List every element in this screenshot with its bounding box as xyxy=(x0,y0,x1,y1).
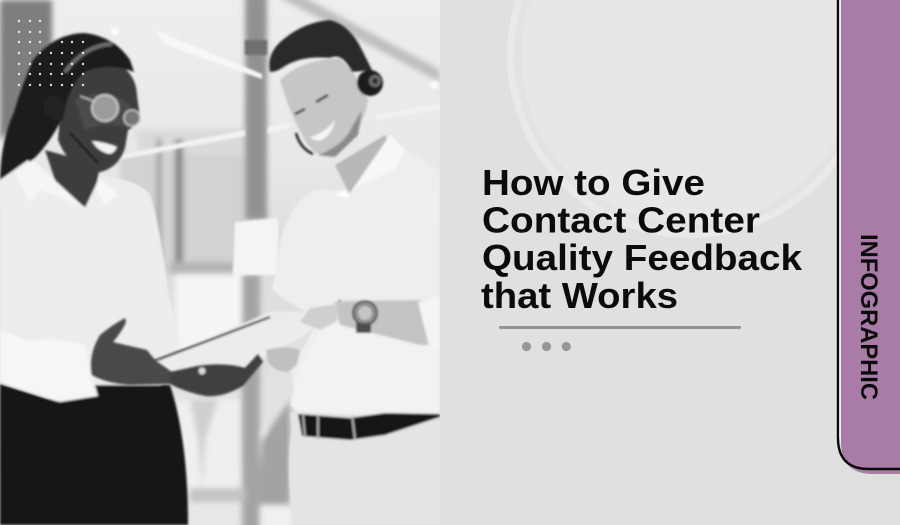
title: that Works xyxy=(481,275,678,316)
photo: two smiling contact center agents reviewing a clipboard xyxy=(0,0,440,525)
title: Quality Feedback xyxy=(482,237,803,278)
divider line xyxy=(499,326,741,329)
title: Contact Center xyxy=(482,200,760,240)
tab: infographic label xyxy=(838,0,900,474)
tab: infographic label: INFOGRAPHIC xyxy=(855,234,882,400)
panel: decorative circle background xyxy=(507,0,873,238)
clipboard held between the agents xyxy=(152,299,340,372)
white box behind xyxy=(233,218,278,275)
hands of the woman xyxy=(91,318,263,396)
title xyxy=(481,162,803,316)
dot grid overlay xyxy=(18,20,84,86)
person: man with headset xyxy=(266,20,440,525)
three dots xyxy=(522,342,571,351)
title: How to Give xyxy=(482,162,705,203)
person: woman with braids xyxy=(0,33,188,525)
